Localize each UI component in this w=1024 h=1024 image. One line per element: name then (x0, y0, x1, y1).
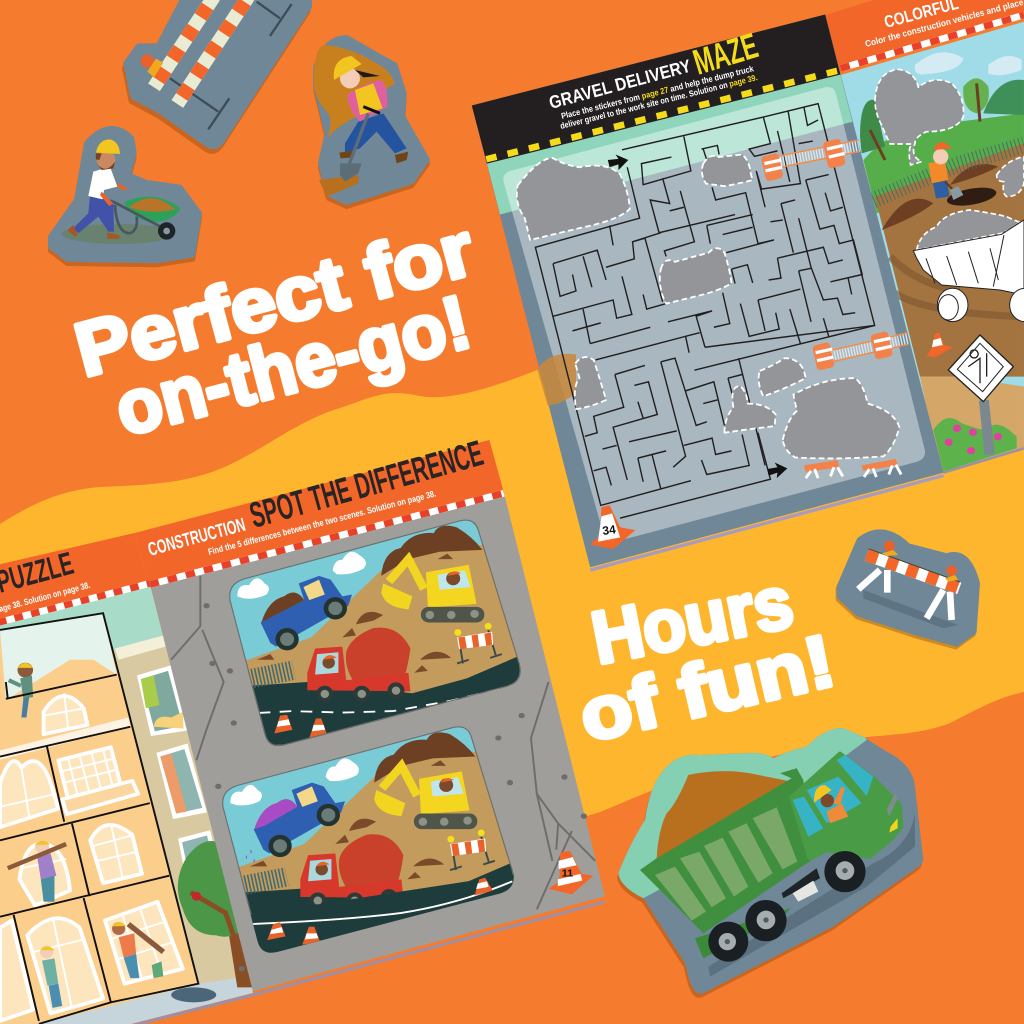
truck wheels (708, 851, 866, 962)
arrow: maze start (608, 155, 628, 170)
gray sticker placeholders (517, 155, 899, 458)
road cones (274, 715, 328, 738)
book spread: right page colorful construction (825, 0, 1024, 473)
puzzle workers (8, 663, 163, 1008)
page scene (841, 22, 1024, 472)
spot the difference title text: SPOT THE DIFFERENCE (245, 432, 487, 536)
icon: cone 11: 11 (562, 868, 573, 879)
puzzle header (0, 533, 150, 622)
barricades (804, 459, 901, 478)
puzzle tree (178, 841, 253, 987)
maze walls (535, 104, 875, 518)
heading: Hours of fun!: Hours (585, 560, 799, 680)
translucent panel (503, 87, 925, 542)
worker (928, 142, 963, 200)
puzzle title text (0, 545, 91, 614)
maze title text: Place the stickers from page 27 and help the dump truck (560, 63, 755, 121)
page edge (943, 448, 1024, 473)
heading: Perfect for on-the-go!: Perfect for (67, 206, 483, 393)
heading: Hours of fun! (572, 560, 842, 758)
truck cab (792, 754, 901, 858)
road centre line (259, 684, 519, 713)
uncoloured dump truck (913, 220, 1024, 322)
mint sky (487, 75, 852, 215)
right page header stripes (841, 15, 1024, 68)
black header (472, 15, 840, 164)
book page: gravel delivery maze (472, 15, 944, 570)
roadwork barrier (454, 623, 502, 663)
book spread: spot the difference and puzzle (0, 440, 605, 1024)
scene outline (229, 520, 521, 746)
sticker: woman with shovel (314, 38, 427, 206)
hazard stripe (486, 70, 840, 159)
spot the difference title text: Find the 5 differences between the two scenes. Solution on page 38. (207, 488, 437, 557)
flowers (948, 428, 998, 451)
maze title text (547, 24, 762, 131)
arrow: maze finish (768, 462, 787, 478)
page edge stack (128, 902, 605, 1024)
background: yellow wave band (0, 300, 1024, 1000)
spot page (134, 440, 605, 991)
heading: Perfect for on-the-go! (67, 206, 483, 452)
maze title text: MAZE (688, 24, 762, 83)
page edge (590, 476, 944, 570)
spot scene top (222, 511, 529, 755)
sticker: worker with wheelbarrow (51, 129, 199, 265)
yellow excavator (381, 559, 484, 622)
maze title text: deliver gravel to the work site on time. Solution on page 39. (559, 72, 758, 131)
spot the difference title text: CONSTRUCTION (146, 515, 248, 561)
truck bed and load (640, 768, 812, 958)
spot scene bottom (222, 726, 514, 953)
brown shape showing through (537, 354, 576, 405)
sticker: road barrier right (838, 532, 977, 647)
spot the difference title text (146, 432, 487, 561)
maze title text: GRAVEL DELIVERY (547, 56, 693, 113)
gray sticker placeholders (875, 69, 1024, 250)
page base (472, 15, 944, 567)
orange header (825, 0, 1024, 72)
icon: worker road sign (948, 335, 1013, 455)
icon: cone 34 (590, 505, 635, 549)
puzzle title text: age 38. Solution on page 38. (0, 580, 91, 614)
red cement mixer (307, 628, 410, 702)
puzzle windows (0, 693, 183, 1021)
icon: cone (927, 333, 953, 357)
blue truck (261, 576, 352, 650)
sticker: road barricade top (125, 0, 309, 151)
puzzle page (0, 583, 253, 1024)
cone number 34: 34 (601, 522, 617, 538)
chain fence (249, 670, 294, 679)
orange barrels and fences (761, 138, 908, 371)
heading: Hours of fun!: of fun! (572, 619, 842, 758)
icon: cone 11 (548, 851, 593, 894)
heading: Perfect for on-the-go!: on-the-go! (107, 280, 479, 452)
sticker: green dump truck (617, 728, 924, 998)
